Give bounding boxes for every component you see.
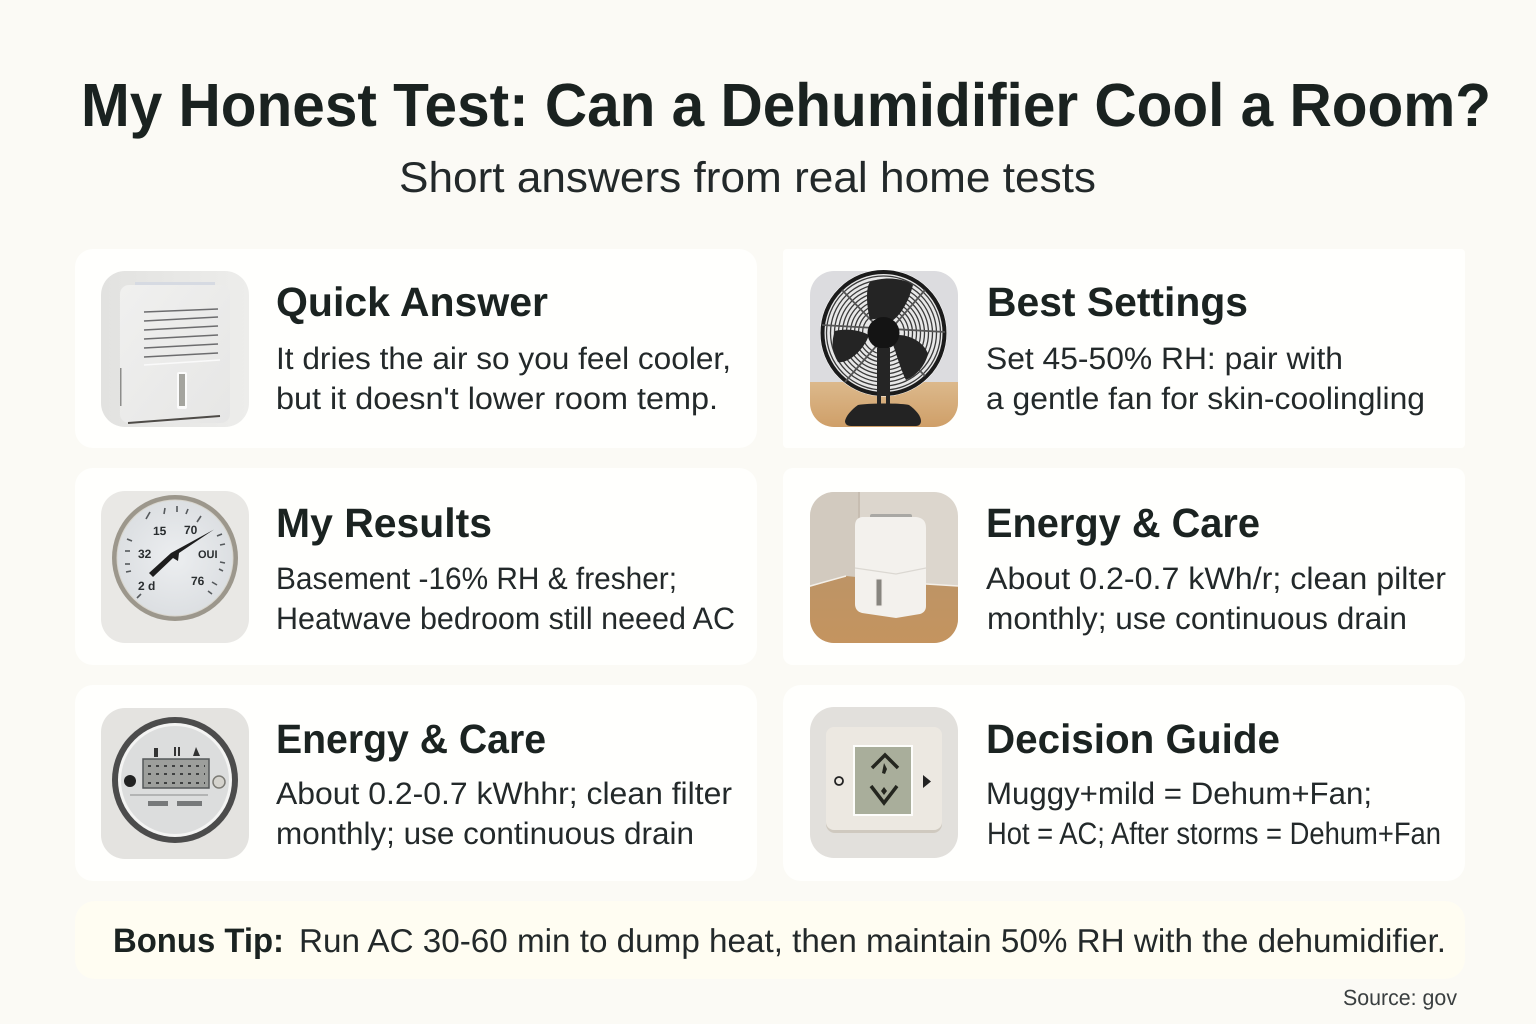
- text: decision guide: Hot = AC; After storms = Dehum+Fan: [987, 816, 1441, 851]
- text: energy and care, left: [276, 776, 732, 851]
- bonus tip label: Bonus Tip:: [113, 922, 284, 960]
- text: best settings: a gentle fan for skin-coolingling: [986, 381, 1425, 416]
- text: decision guide: [986, 776, 1441, 851]
- icon: dehumidifier in a room: [810, 492, 958, 643]
- text: quick answer: but it doesn't lower room temp.: [276, 381, 718, 416]
- text: energy and care, left: monthly; use continuous drain: [276, 816, 694, 851]
- text: my results: [276, 561, 735, 636]
- text: energy and care, right: About 0.2-0.7 kWh/r; clean pilter: [986, 561, 1446, 596]
- title: My Honest Test: Can a Dehumidifier Cool a Room?: [81, 71, 1491, 139]
- text: quick answer: It dries the air so you feel cooler,: [276, 341, 731, 376]
- icon: electric meter: [101, 708, 249, 859]
- bonus tip text: Run AC 30-60 min to dump heat, then maintain 50% RH with the dehumidifier.: [299, 922, 1446, 959]
- gauge label ON: OUI: [198, 549, 218, 561]
- source note: Source: gov: [1343, 985, 1457, 1010]
- heading: my results: My Results: [276, 500, 492, 546]
- gauge label 76: 76: [191, 574, 205, 588]
- panel: energy and care, right: [810, 492, 1446, 643]
- text: quick answer: [276, 341, 731, 416]
- text: energy and care, right: monthly; use continuous drain: [987, 601, 1407, 636]
- heading: quick answer: Quick Answer: [276, 279, 548, 325]
- text: decision guide: Muggy+mild = Dehum+Fan;: [986, 776, 1372, 811]
- panel: decision guide: [783, 685, 1465, 881]
- heading: best settings: Best Settings: [987, 279, 1248, 325]
- text: my results: Heatwave bedroom still neeed AC: [276, 601, 735, 636]
- text: best settings: [986, 341, 1425, 416]
- gauge label 2 d: 2 d: [138, 579, 155, 593]
- panel: energy and care, left: [75, 685, 757, 881]
- icon: control panel: [810, 707, 958, 858]
- icon: dehumidifier: [101, 271, 249, 427]
- panel: my results: [75, 468, 757, 665]
- callout: bonus tip: [75, 901, 1465, 979]
- text: energy and care, right: [986, 561, 1446, 636]
- heading: energy and care, right: Energy & Care: [986, 500, 1260, 546]
- icon: gauge: [101, 491, 249, 643]
- gauge label 15: 15: [153, 524, 167, 538]
- heading: decision guide: Decision Guide: [986, 716, 1280, 762]
- heading: energy and care, left: Energy & Care: [276, 716, 546, 762]
- gauge label 32: 32: [138, 547, 152, 561]
- icon: desk fan: [810, 270, 958, 427]
- text: best settings: Set 45-50% RH: pair with: [986, 341, 1343, 376]
- gauge label 70: 70: [184, 523, 198, 537]
- text: my results: Basement -16% RH & fresher;: [276, 561, 677, 596]
- panel: best settings: [810, 270, 1423, 427]
- panel: quick answer: [101, 271, 728, 427]
- text: energy and care, left: About 0.2-0.7 kWhhr; clean filter: [276, 776, 732, 811]
- subtitle: Short answers from real home tests: [399, 154, 1096, 202]
